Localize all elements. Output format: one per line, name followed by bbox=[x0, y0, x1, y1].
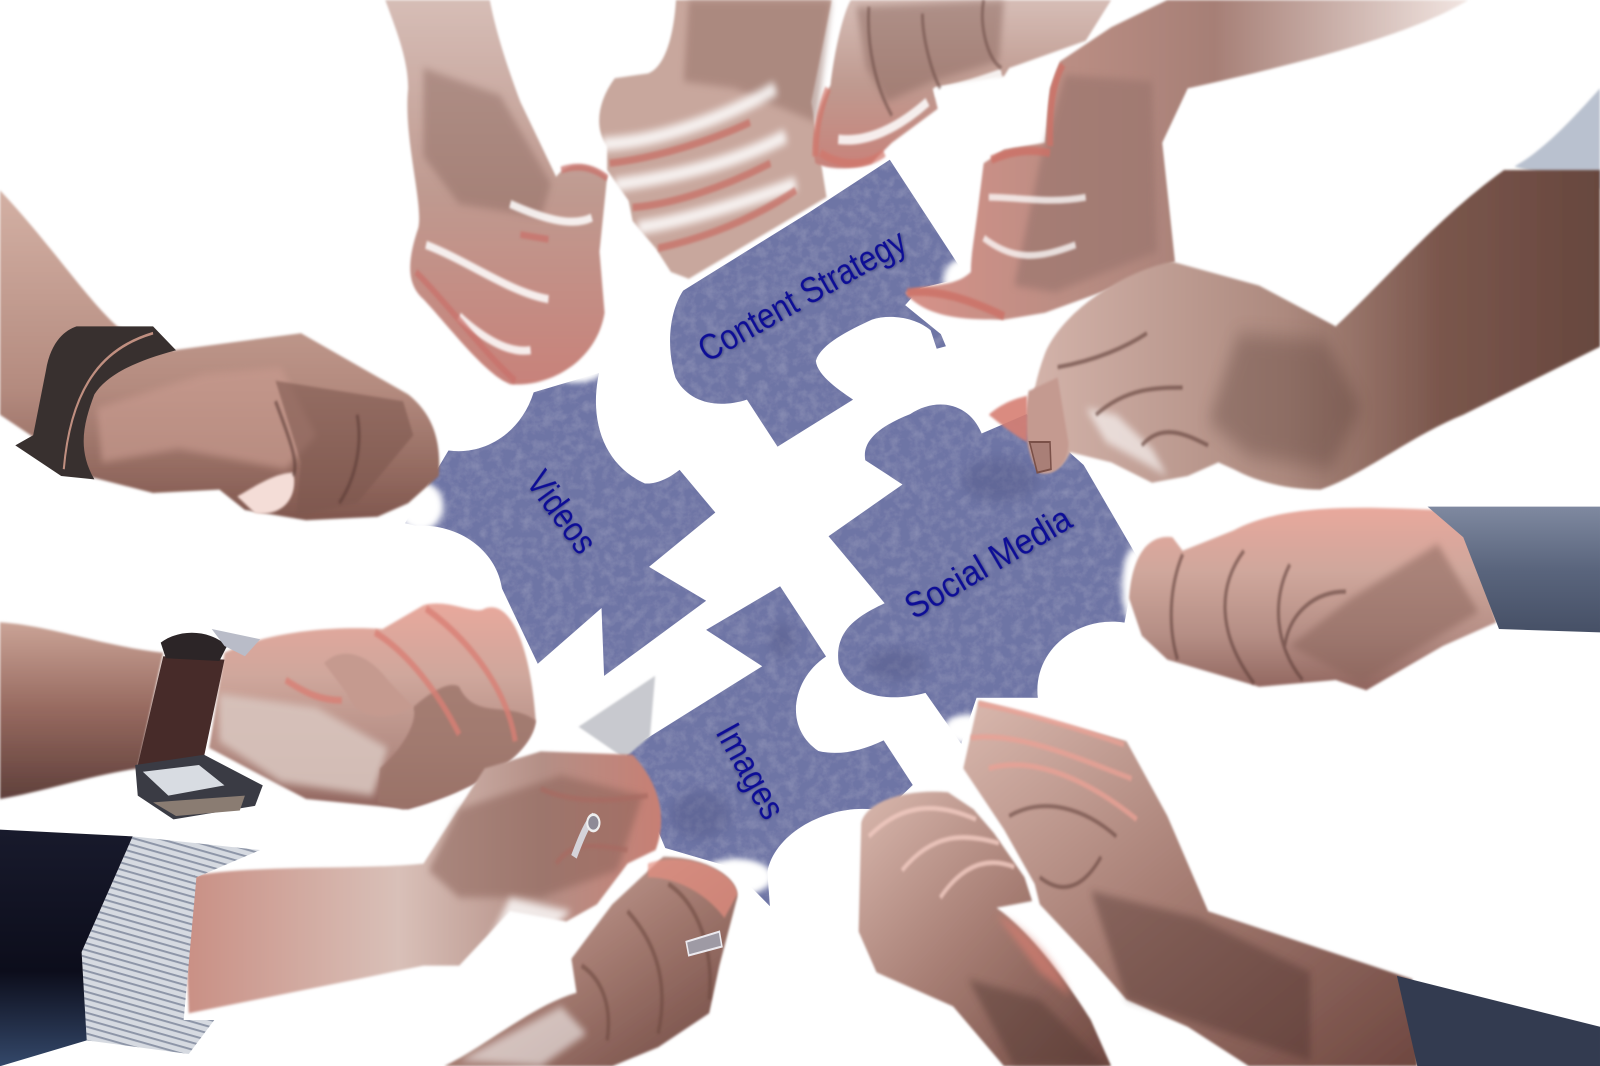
hand: top centre-left fist bbox=[385, 0, 607, 384]
hand: right fist with sleeve bbox=[1129, 507, 1600, 690]
wrist band bbox=[15, 326, 176, 479]
dark cuff bbox=[1397, 976, 1600, 1066]
label: Social Media: Social Media bbox=[897, 497, 1079, 627]
label: Content Strategy: Content Strategy bbox=[691, 220, 913, 370]
right-side hands bbox=[814, 0, 1600, 1066]
label: Videos: Videos bbox=[519, 463, 606, 561]
puzzle bbox=[405, 160, 1137, 906]
ring bbox=[574, 816, 594, 857]
arm: leather band arm bbox=[0, 190, 439, 520]
hand: top right fist with raised wrist bbox=[905, 0, 1468, 320]
left-side hands bbox=[0, 0, 832, 1066]
watch case bbox=[135, 755, 263, 819]
panel: Videos piece bbox=[405, 373, 715, 676]
image fragment: pale left tip bbox=[579, 676, 655, 758]
jacket sleeve bbox=[0, 830, 133, 1066]
arm: sleeved arm with ring bbox=[0, 751, 661, 1066]
panel: Content Strategy piece bbox=[670, 160, 966, 447]
panel: Social Media piece bbox=[829, 405, 1137, 744]
darker paper blotches bbox=[670, 458, 1038, 839]
watch buckle bbox=[161, 633, 227, 661]
arm: wrist watch arm bbox=[0, 604, 536, 819]
sleeve: top right pale sleeve bbox=[1514, 88, 1600, 189]
soft glow over puzzle edges bbox=[397, 259, 1147, 895]
thumbnail bbox=[1030, 442, 1051, 473]
hand: bottom fist with ring bbox=[444, 857, 737, 1066]
thumb bbox=[1026, 377, 1068, 473]
hand: bottom centre-right fist bbox=[859, 792, 1111, 1066]
ring bbox=[686, 932, 722, 955]
hand: big right fist and hairy arm bbox=[989, 170, 1600, 490]
watch strap bbox=[138, 656, 224, 768]
shirt cuff bbox=[82, 836, 260, 1054]
hand: bottom right large fist bbox=[963, 700, 1600, 1066]
shirt sleeve bbox=[1428, 507, 1600, 632]
hand: top centre fist bbox=[599, 0, 832, 279]
label: Images: Images bbox=[708, 716, 794, 826]
panel: Images piece bbox=[579, 586, 913, 906]
hand: top right-centre fist bbox=[814, 0, 1111, 168]
